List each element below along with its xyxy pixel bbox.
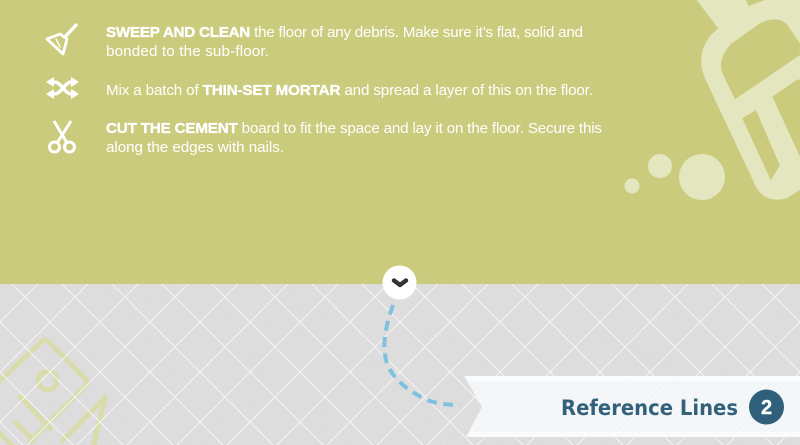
icon: large bubble (679, 154, 725, 200)
ribbon: section label (464, 376, 800, 437)
step 3 text: along the edges with nails. (106, 139, 284, 156)
step 3 text: CUT THE CEMENT board to fit the space and lay it on the floor. Secure this (106, 120, 602, 137)
panel: tiled floor background (0, 284, 800, 445)
icon: large faded brush (697, 0, 800, 200)
icon: small bubble (624, 178, 640, 194)
step 3 text (106, 120, 602, 156)
step 1 text: bonded to the sub-floor. (106, 43, 269, 60)
icon: down chevron button (382, 266, 416, 300)
step 1 text: SWEEP AND CLEAN the floor of any debris. Make sure it’s flat, solid and (106, 24, 583, 41)
icon: scissors (50, 121, 74, 152)
step 2 text: Mix a batch of THIN-SET MORTAR and spread a layer of this on the floor. (106, 82, 593, 99)
badge: number 2: 2 (761, 397, 772, 419)
icon: faded tool watermark (0, 340, 105, 445)
dashed arrow path (384, 305, 460, 405)
heading: reference lines: Reference Lines (561, 396, 738, 421)
icon: shuffle arrows (46, 77, 79, 99)
icon: broom (47, 25, 76, 54)
badge: number 2 (749, 390, 784, 424)
step 1 text (106, 24, 583, 60)
icon: medium bubble (648, 154, 672, 178)
panel: green instructions panel (0, 0, 800, 284)
